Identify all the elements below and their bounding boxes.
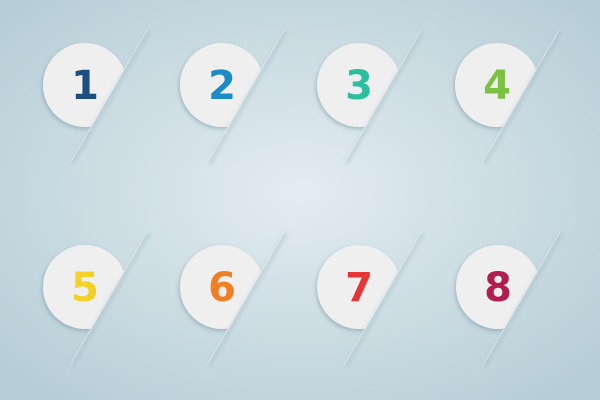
- item 4: [455, 13, 600, 177]
- item 7: [317, 215, 509, 379]
- item 7: 7: [345, 265, 373, 311]
- item 8: 8: [484, 265, 512, 311]
- item 1: [43, 13, 235, 177]
- item 2: 2: [208, 63, 236, 109]
- item 3: 3: [345, 63, 373, 109]
- item 4: 4: [483, 63, 511, 109]
- item 3: [317, 13, 509, 177]
- item 6: 6: [208, 265, 236, 311]
- item 2: [180, 13, 372, 177]
- item 5: 5: [71, 265, 99, 311]
- item 6: [180, 215, 372, 379]
- item 1: 1: [71, 63, 99, 109]
- item 5: [43, 215, 235, 379]
- item 8: [456, 215, 600, 379]
